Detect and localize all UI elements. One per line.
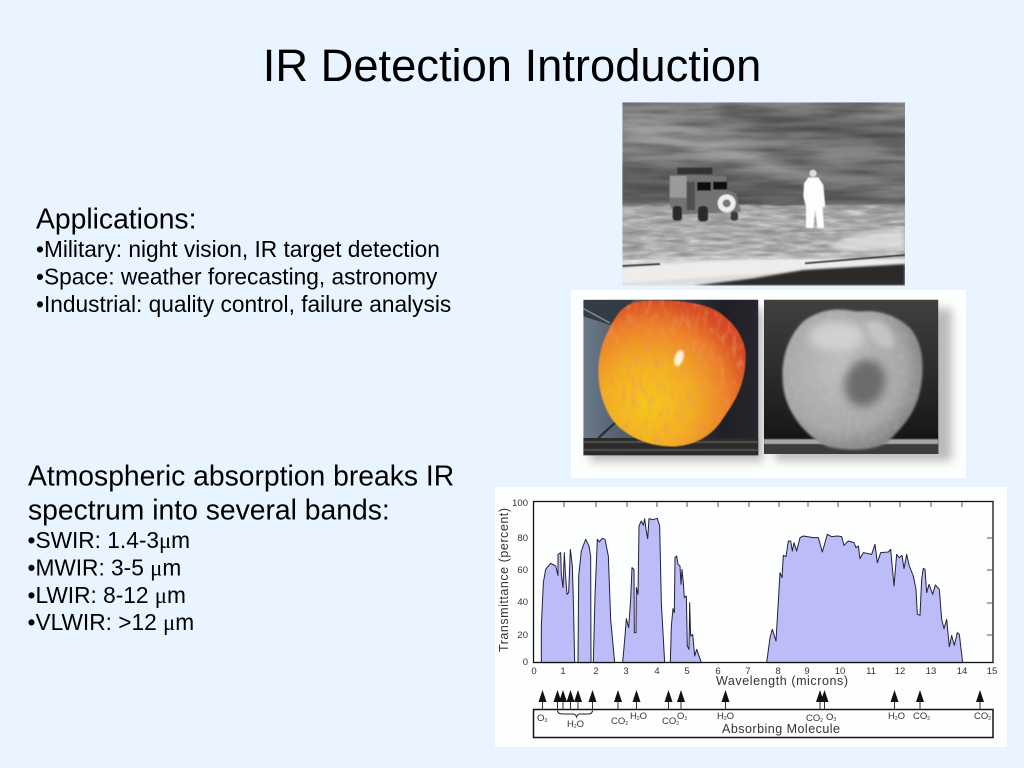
transmittance chart panel <box>495 487 1007 747</box>
text block: atmospheric bands: •MWIR: 3-5 μm <box>28 554 181 580</box>
y axis title: Transmittance (percent) <box>497 508 511 652</box>
molecule labels: O <box>640 711 647 722</box>
text block: applications <box>36 202 451 317</box>
text block: atmospheric bands: •LWIR: 8-12 μm <box>28 582 186 608</box>
visible apple photo <box>583 300 758 455</box>
x axis labels: 11 <box>866 666 876 677</box>
text block: applications: •Industrial: quality control, failure analysis <box>36 291 451 317</box>
chart frame and ticks <box>534 502 993 662</box>
x axis labels: 10 <box>835 666 845 677</box>
y axis labels <box>512 498 528 668</box>
x axis labels: 15 <box>987 666 997 677</box>
molecule labels: H <box>888 711 895 722</box>
molecule labels: 2 <box>927 716 930 722</box>
x axis labels: 1 <box>560 666 566 677</box>
person <box>803 170 825 228</box>
molecule labels: CO <box>974 711 988 722</box>
molecule labels: H <box>717 711 724 722</box>
x axis labels: 6 <box>715 666 721 677</box>
molecule labels: O <box>677 711 684 722</box>
x axis labels: 12 <box>895 666 905 677</box>
water brace <box>558 710 592 717</box>
chart: transmittance bands, left part <box>541 518 701 663</box>
molecule labels <box>537 711 991 730</box>
molecule labels: H <box>630 711 637 722</box>
text block: applications: Applications: <box>36 202 196 234</box>
molecule labels: CO <box>913 711 927 722</box>
apple image panel <box>571 290 966 478</box>
molecule labels: 2 <box>820 718 823 724</box>
y axis labels: 80 <box>517 533 528 544</box>
molecule labels: O <box>898 711 905 722</box>
y axis labels: 20 <box>517 630 528 641</box>
text block: atmospheric bands: •VLWIR: >12 μm <box>28 609 194 635</box>
x axis labels: 7 <box>745 666 751 677</box>
y axis labels: 0 <box>523 657 528 668</box>
title: IR Detection Introduction <box>263 40 761 91</box>
x axis title: Wavelength (microns) <box>716 674 848 688</box>
molecule labels: 3 <box>684 716 687 722</box>
y axis labels: 60 <box>517 565 528 576</box>
molecule labels: 2 <box>625 721 628 727</box>
molecule labels: 2 <box>895 716 898 722</box>
molecule labels: O <box>537 713 544 724</box>
absorption arrows <box>538 690 984 710</box>
molecule labels: 2 <box>574 724 577 730</box>
molecule labels: O <box>826 712 833 723</box>
y axis labels: 100 <box>512 498 528 509</box>
infrared apple photo <box>764 300 938 454</box>
x axis labels <box>531 666 997 677</box>
x axis labels: 13 <box>926 666 936 677</box>
x axis labels: 4 <box>654 666 660 677</box>
x axis labels: 2 <box>593 666 599 677</box>
x axis labels: 3 <box>623 666 629 677</box>
x axis labels: 14 <box>957 666 967 677</box>
molecule labels: CO <box>662 716 676 727</box>
molecule labels: 3 <box>833 717 836 723</box>
x axis labels: 8 <box>775 666 781 677</box>
y axis labels: 40 <box>517 597 528 608</box>
text block: atmospheric bands: spectrum into several bands: <box>28 494 390 526</box>
molecule labels: O <box>727 711 734 722</box>
text block: atmospheric bands: •SWIR: 1.4-3μm <box>28 527 190 553</box>
molecule labels: 3 <box>544 718 547 724</box>
x axis labels: 9 <box>804 666 810 677</box>
molecule labels: 2 <box>637 716 640 722</box>
x axis labels: 0 <box>531 666 537 677</box>
absorbing molecule box <box>534 710 993 738</box>
molecule labels: O <box>577 719 584 730</box>
x axis labels: 5 <box>684 666 690 677</box>
chart: transmittance band, right part <box>767 534 963 663</box>
text block: applications: •Military: night vision, IR target detection <box>36 236 440 262</box>
text block: atmospheric bands <box>28 460 454 635</box>
text block: atmospheric bands: Atmospheric absorption breaks IR <box>28 460 454 492</box>
thermal image: vehicle and person <box>620 102 907 286</box>
molecule labels: 2 <box>676 721 679 727</box>
molecule labels: CO <box>611 716 625 727</box>
molecule labels: H <box>567 719 574 730</box>
molecule labels: 2 <box>988 716 991 722</box>
text block: applications: •Space: weather forecasting, astronomy <box>36 264 438 290</box>
box caption: Absorbing Molecule <box>722 722 840 736</box>
vehicle <box>669 168 741 221</box>
molecule labels: CO <box>806 713 820 724</box>
molecule labels: 2 <box>724 716 727 722</box>
